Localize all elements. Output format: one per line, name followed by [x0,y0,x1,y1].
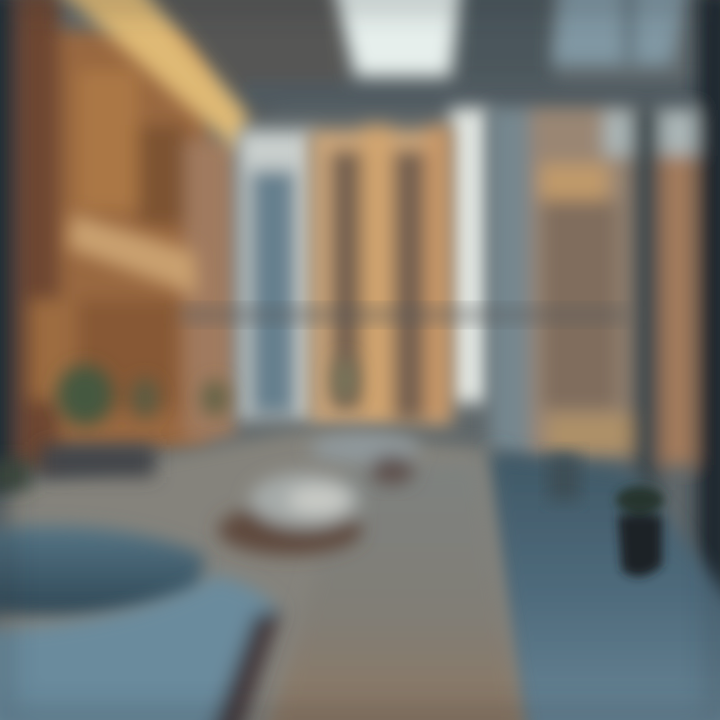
golden ceiling beam [48,0,248,152]
carpet [265,462,525,720]
centre lounge table [218,473,362,555]
right side structure [490,0,720,620]
left wooden wall [0,0,235,490]
floor [0,430,530,720]
centre windows [238,108,488,420]
soft right-floor plant [548,455,580,500]
skylight windows [332,0,690,76]
back seating [310,432,420,485]
planters on the left [0,358,357,490]
horizontal glass mullion [180,306,630,324]
centre wooden columns [310,125,452,425]
foreground sofa [0,575,282,720]
dark planter on the right [616,486,664,576]
wooden balcony shelf [68,214,198,296]
right blue floor [488,450,720,720]
foreground blue cushion [0,526,205,616]
ceiling [135,0,710,120]
